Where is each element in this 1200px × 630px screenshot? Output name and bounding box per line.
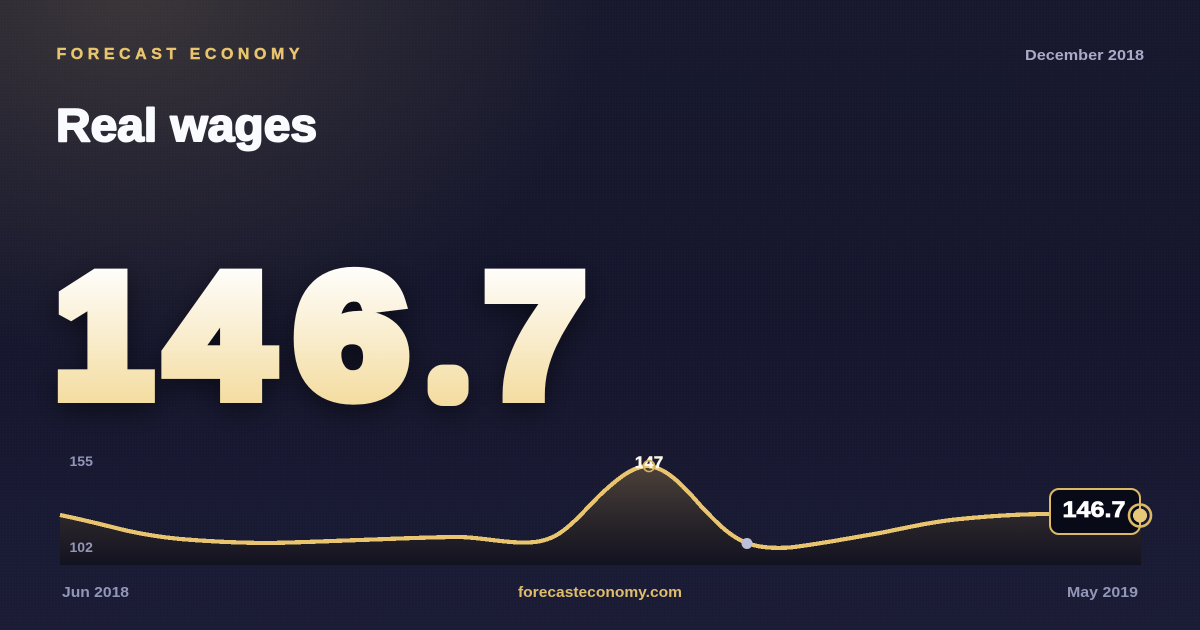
axis label: maximum: 155 (70, 453, 93, 469)
sparkline chart (60, 453, 1151, 565)
end value badge (1050, 489, 1140, 534)
start date label: Jun 2018 (62, 584, 129, 601)
brand label: FORECAST ECONOMY (56, 46, 300, 63)
peak value label: 147 (635, 453, 663, 472)
date label: December 2018 (1025, 47, 1144, 64)
peak marker (644, 460, 654, 472)
secondary marker (742, 538, 752, 549)
headline value: 6 (296, 239, 407, 432)
headline value: 7 (485, 240, 585, 432)
headline value: . (438, 328, 458, 406)
axis label: minimum: 102 (70, 539, 93, 555)
title: Real wages (56, 99, 317, 151)
headline value: 4 (167, 240, 272, 432)
chart line (60, 466, 1050, 548)
headline value (55, 239, 585, 432)
chart area fill (60, 466, 1141, 565)
source url: forecasteconomy.com (518, 584, 682, 601)
end date label: May 2019 (1067, 584, 1138, 601)
end value badge: 146.7 (1062, 497, 1126, 522)
end marker (1129, 504, 1151, 526)
headline value: 1 (55, 240, 152, 432)
